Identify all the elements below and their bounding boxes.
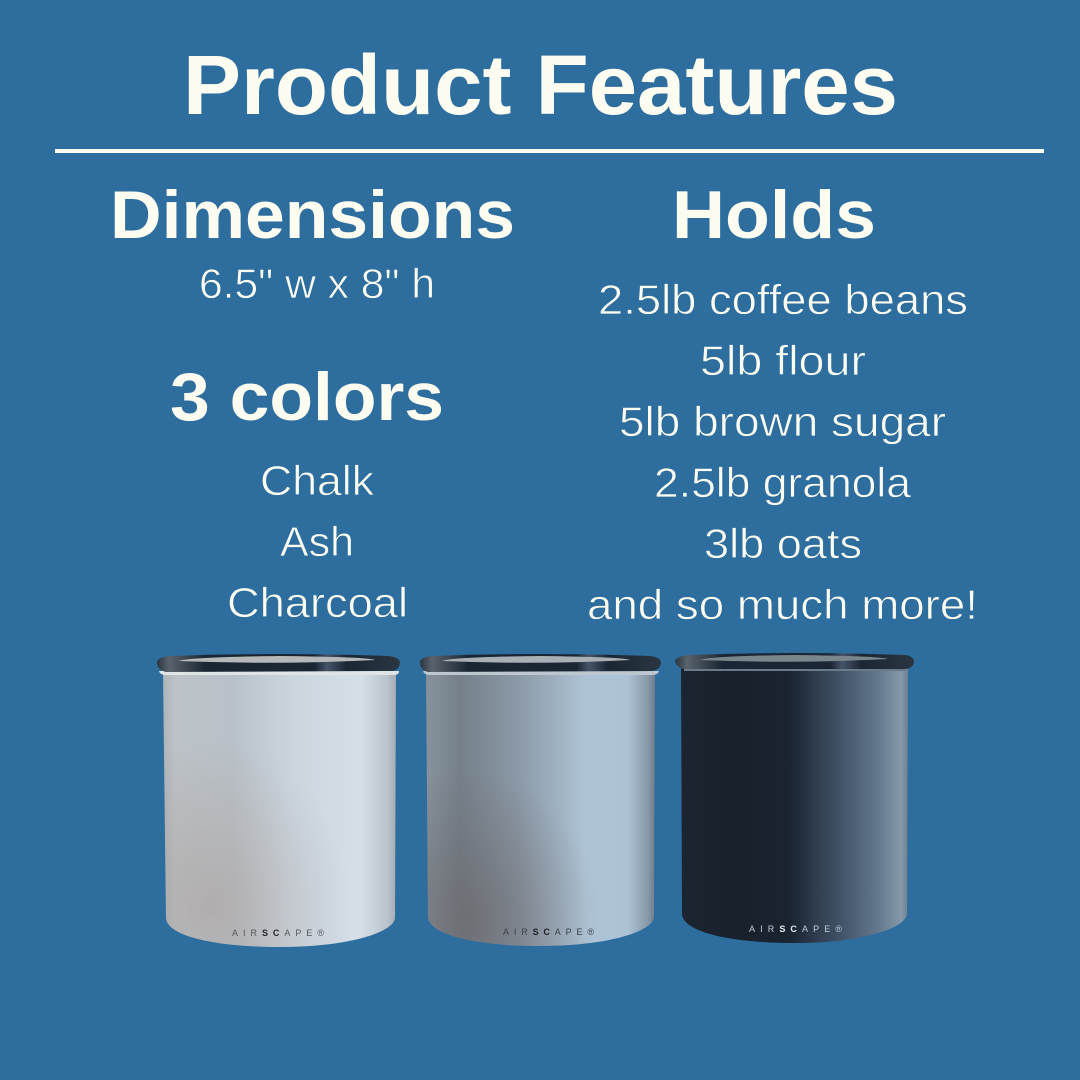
list: capacities: 5lb brown sugar [619, 398, 946, 445]
heading: 3 colors: 3 colors [170, 359, 444, 435]
list: capacities: 3lb oats [704, 520, 862, 567]
canister: charcoal: AIR SC APE® [749, 924, 842, 934]
canister: chalk: AIR SC APE® [232, 928, 324, 938]
canister: ash [420, 654, 661, 946]
canister: chalk [157, 654, 400, 947]
panel: colors [170, 359, 444, 626]
list: color names [227, 457, 408, 626]
canister: ash: AIR SC APE® [503, 927, 594, 937]
title: Product Features [183, 38, 898, 132]
list: color names: Chalk [260, 457, 375, 504]
canister: charcoal [675, 653, 914, 943]
panel: dimensions [110, 177, 515, 307]
list: capacities: 5lb flour [700, 337, 866, 384]
heading: holds: Holds [672, 177, 876, 253]
list: capacities: 2.5lb granola [654, 459, 912, 506]
panel: holds [587, 177, 978, 628]
text: dimensions value: 6.5" w x 8" h [199, 260, 435, 307]
list: capacities: and so much more! [587, 581, 978, 628]
list: color names: Ash [280, 518, 354, 565]
list: capacities [587, 276, 978, 628]
list: capacities: 2.5lb coffee beans [598, 276, 968, 323]
heading: dimensions: Dimensions [110, 177, 515, 253]
list: color names: Charcoal [227, 579, 408, 626]
